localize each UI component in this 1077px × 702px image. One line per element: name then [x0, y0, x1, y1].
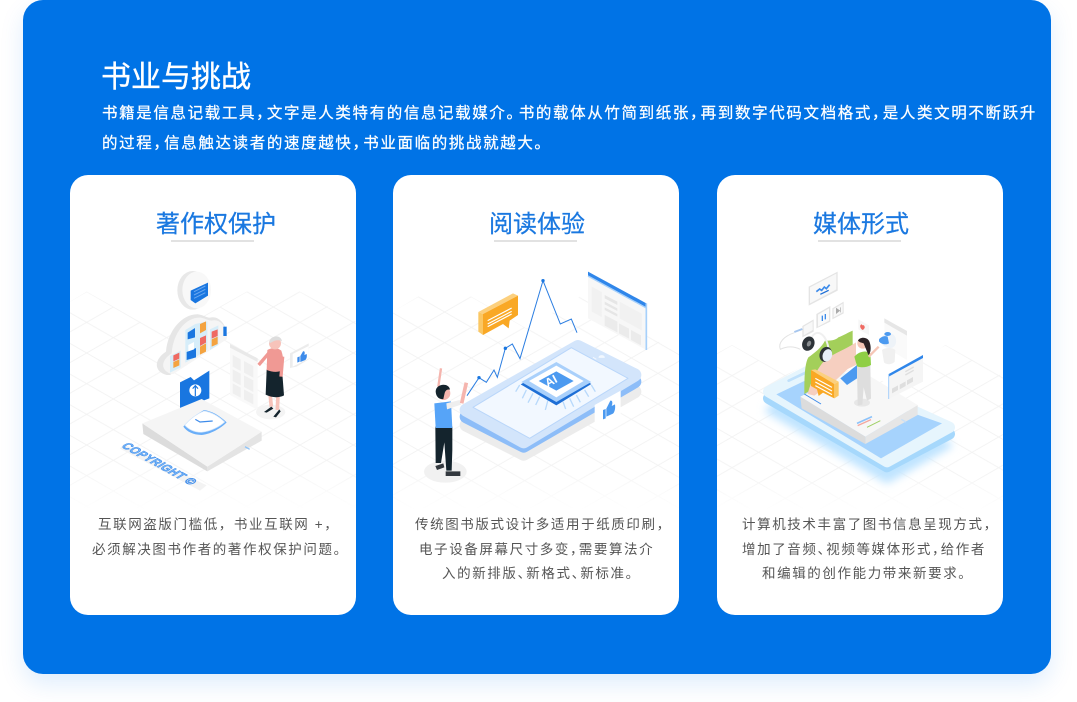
- heading underline: [494, 240, 577, 242]
- person: woman: [256, 336, 285, 419]
- description text: 传统图书版式设计多适用于纸质印刷，: [415, 517, 665, 532]
- heading: 著作权保护: 著作权保护: [156, 211, 276, 238]
- panel: small tablet behind robot: [884, 318, 907, 360]
- smartphone: [466, 347, 635, 454]
- heading: 媒体形式: 媒体形式: [813, 211, 909, 238]
- person: man raising hands: [424, 368, 467, 483]
- intro text: 书籍是信息记载工具，文字是人类特有的信息记载媒介。书的载体从竹简到纸张，再到数字代码文档格式，是人类文明不断跃升: [102, 105, 1037, 122]
- icon: chart card: [809, 272, 838, 306]
- text: COPYRIGHT: COPYRIGHT ©: [118, 441, 201, 487]
- description text: [742, 517, 992, 581]
- title: 书业与挑战: [101, 61, 251, 94]
- icon: thumbs-up card: [595, 391, 621, 430]
- illustration: media forms: [717, 272, 1003, 488]
- pop-up map: [804, 331, 857, 396]
- icon: speech bubble: [478, 293, 518, 335]
- icon: book badge: [177, 271, 211, 310]
- display board: [230, 344, 258, 410]
- heading: 阅读体验: 阅读体验: [489, 211, 585, 238]
- description text: 计算机技术丰富了图书信息呈现方式，: [742, 517, 992, 532]
- book platform: [142, 399, 262, 471]
- panel: 媒体形式: [717, 175, 1003, 615]
- illustration: reading experience: [393, 272, 679, 482]
- heading underline: [171, 240, 254, 242]
- description text: 必须解决图书作者的著作权保护问题。: [92, 542, 349, 557]
- icon: media control buttons: [802, 302, 844, 337]
- robot assistant: [879, 332, 896, 364]
- icon: heart card: [858, 319, 869, 335]
- intro text: [102, 104, 1037, 152]
- description text: 和编辑的创作能力带来新要求。: [762, 566, 973, 581]
- description text: 增加了音频、视频等媒体形式，给作者: [742, 542, 986, 557]
- description text: [415, 517, 665, 581]
- intro text: 的过程，信息触达读者的速度越快，书业面临的挑战就越大。: [102, 135, 552, 152]
- panel: 阅读体验: [393, 175, 679, 615]
- icon: headphones: [780, 329, 834, 364]
- icon: cloud library: [157, 314, 227, 375]
- person: woman: [854, 338, 879, 407]
- browser window: [889, 355, 923, 399]
- description text: 入的新排版、新格式、新标准。: [442, 566, 641, 581]
- icon: thumbs-up card: [290, 343, 309, 368]
- book platform: [800, 368, 918, 444]
- heading underline: [818, 240, 901, 242]
- AI chip: AI: [543, 372, 560, 390]
- icon: upload folder: [180, 371, 209, 409]
- panel: 著作权保护: [70, 175, 356, 615]
- description text: 互联网盗版门槛低，书业互联网 +，: [98, 517, 339, 532]
- icon: speech bubble: [811, 369, 839, 398]
- description text: 电子设备屏幕尺寸多变，需要算法介: [419, 542, 654, 557]
- description text: [92, 517, 349, 557]
- browser window: [588, 272, 646, 350]
- illustration: copyright protection: [70, 271, 356, 490]
- icon: shield with check: [183, 410, 227, 435]
- smartphone base with glow: [769, 367, 949, 480]
- line chart: [467, 279, 577, 396]
- AI chip: [516, 362, 595, 410]
